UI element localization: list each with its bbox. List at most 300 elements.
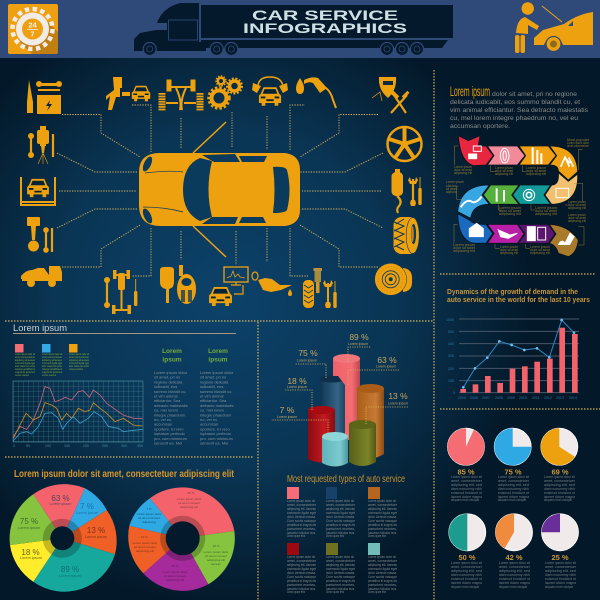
callout labels: 13 % bbox=[388, 391, 408, 401]
serpentine captions: Lorem ipsum bbox=[499, 206, 521, 210]
segment: orange curve bbox=[550, 146, 578, 180]
serpentine captions: Lorem ipsum bbox=[568, 213, 586, 217]
serpentine captions: adipiscing elit bbox=[453, 249, 475, 253]
service type legend: nascetur ridiculus mus. bbox=[326, 531, 355, 535]
legend squares: natoque penatibus et bbox=[42, 367, 62, 371]
service type legend: penatibus et magnis dis bbox=[368, 523, 397, 527]
bar and line chart bbox=[446, 318, 579, 400]
donut chart: right: aenean bbox=[211, 562, 221, 566]
serpentine captions: Lorem ipsum bbox=[526, 166, 546, 170]
segment: red bbox=[458, 136, 493, 166]
service type legend: penatibus et magnis dis bbox=[368, 579, 397, 583]
legend squares: commodo ligula eget bbox=[15, 361, 35, 365]
service type legend: commodo ligula eget bbox=[368, 511, 397, 515]
serpentine captions: adipiscing elit bbox=[495, 172, 513, 176]
service type legend: parturient montes, bbox=[368, 527, 397, 531]
donut chart: right: Lorem ipsum dolor bbox=[177, 497, 201, 501]
text columns: sit amet, pri no bbox=[154, 375, 181, 380]
serpentine captions: adipiscing elit bbox=[526, 172, 546, 176]
service type legend: nascetur ridiculus mus. bbox=[368, 531, 397, 535]
pie captions: amet, consectetuer bbox=[451, 479, 483, 483]
pie captions: aliquam erat volutpat bbox=[544, 498, 572, 502]
pie captions: adipiscing elit, sed bbox=[451, 483, 482, 487]
3D cylinder chart bbox=[271, 332, 409, 466]
icon: diagnostic monitor and car bbox=[209, 267, 248, 306]
pie captions: adipiscing elit, sed bbox=[545, 569, 576, 573]
bar and line chart: 2014 bbox=[569, 396, 577, 400]
segment: orange bbox=[519, 146, 556, 165]
donut chart: right: adipiscing bbox=[142, 520, 156, 524]
icon: chassis with tools bbox=[104, 270, 137, 314]
icon: mechanic and car bbox=[515, 2, 593, 53]
service type legend: adipiscing elit. Aenean bbox=[326, 507, 355, 511]
bar and line chart: 300 bbox=[448, 354, 454, 358]
service type legend: Lorem ipsum dolor sit bbox=[368, 499, 396, 503]
donut chart: left: 63 % bbox=[51, 494, 70, 503]
service type legend: Donec quam felis bbox=[287, 590, 305, 594]
text columns: pro, cum minimum bbox=[200, 436, 234, 441]
text: intro paragraph bbox=[450, 84, 589, 130]
text columns: ipsum bbox=[208, 356, 228, 364]
small pie: 25% bbox=[542, 514, 578, 551]
pie captions: Lorem ipsum dolor sit bbox=[451, 561, 482, 565]
donut chart: left: 89 % bbox=[61, 565, 79, 574]
icon: truck bbox=[134, 3, 453, 56]
icon: gears bbox=[208, 76, 242, 108]
heading: Lorem ipsum section: Lorem ipsum bbox=[13, 323, 67, 333]
legend squares: magnis dis parturient bbox=[15, 370, 35, 374]
line chart: 150 bbox=[64, 444, 70, 448]
pie captions: Lorem ipsum dolor sit bbox=[544, 475, 575, 479]
legend squares: amet consectetuer bbox=[15, 355, 35, 359]
serpentine captions: Lorem ipsum bbox=[446, 180, 464, 184]
donut chart: left: 18 % bbox=[21, 548, 40, 557]
icon: welding mask and hammers bbox=[372, 77, 410, 113]
segment: pink bbox=[487, 146, 525, 165]
donut chart: right: Lorem ipsum dolor bbox=[163, 570, 187, 574]
legend squares: Lorem ipsum dolor sit bbox=[15, 352, 35, 356]
icon: car with sprays bbox=[252, 77, 288, 106]
text columns: regione delicata bbox=[154, 379, 183, 384]
service type legend: nascetur ridiculus mus. bbox=[287, 531, 316, 535]
donut chart: left: 13 % bbox=[87, 526, 105, 535]
legend squares: adipiscing elit aenean bbox=[42, 358, 62, 362]
icon: spray gun and car bbox=[106, 77, 150, 110]
service type legend bbox=[287, 487, 398, 594]
donut chart: right: adipiscing elit bbox=[136, 549, 154, 553]
heading: most requested: Most requested types of auto service bbox=[287, 473, 405, 485]
segments bbox=[458, 136, 578, 257]
service type legend: parturient montes, bbox=[326, 583, 355, 587]
donut chart: left bbox=[10, 484, 117, 592]
service type legend: amet, consectetuer bbox=[326, 559, 356, 563]
serpentine captions: Lorem ipsum bbox=[500, 245, 518, 249]
text: intro paragraph: cu, mel lorem integre phaedrum no, vel eu bbox=[450, 115, 578, 122]
icon: 24/7 gear tile: 24 bbox=[28, 20, 37, 30]
pie captions: aliquam erat volutpat bbox=[499, 585, 527, 589]
donut chart: left: 75 % bbox=[20, 517, 38, 526]
legend squares: adipiscing elit aenean bbox=[69, 358, 89, 362]
text columns: efficiantur. Sea bbox=[154, 398, 181, 403]
line chart: 100 bbox=[45, 444, 51, 448]
text columns: integre phaedrum bbox=[200, 412, 232, 417]
icon: oil can bbox=[252, 272, 292, 296]
text columns: efficiantur. Sea bbox=[200, 398, 227, 403]
line chart: 350 bbox=[137, 444, 143, 448]
donut chart: right: 18 % bbox=[213, 544, 220, 548]
legend squares: natoque penatibus et bbox=[15, 367, 35, 371]
heading: dynamics chart bbox=[447, 287, 590, 304]
service type legend: dolor. Aenean massa. bbox=[368, 515, 397, 519]
icon: suspension bbox=[162, 80, 200, 111]
service type legend: Cum sociis natoque bbox=[326, 519, 355, 523]
icon: tire bbox=[394, 217, 419, 254]
service type legend: Donec quam felis bbox=[326, 534, 344, 538]
serpentine captions: Lorem ipsum bbox=[568, 200, 586, 204]
cylinder: orange bbox=[357, 384, 384, 459]
serpentine captions: dolor sit amet bbox=[495, 169, 513, 173]
legend squares: natoque penatibus bbox=[69, 367, 83, 371]
pie percentages: 42 % bbox=[505, 553, 523, 562]
service type legend: adipiscing elit. Aenean bbox=[368, 563, 397, 567]
icon: wheel rim bbox=[388, 127, 422, 161]
bar and line chart: 2012 bbox=[544, 396, 552, 400]
cylinder: navy bbox=[320, 376, 345, 450]
icon: shock absorber, tread and tools bbox=[303, 268, 337, 308]
icon: battery and tools bbox=[27, 80, 62, 114]
bar and line chart: 2007 bbox=[482, 396, 490, 400]
service type legend: commodo ligula eget bbox=[326, 567, 355, 571]
serpentine captions: dolor sit amet bbox=[568, 216, 586, 220]
pie percentages: 69 % bbox=[551, 468, 569, 476]
pie captions: laoreet dolore magna bbox=[545, 581, 576, 585]
cylinder: pink bbox=[333, 354, 360, 440]
legend squares: amet consectetuer bbox=[42, 355, 62, 359]
donut chart: left: Lorem ipsum bbox=[50, 502, 71, 506]
service type legend: penatibus et magnis dis bbox=[326, 579, 355, 583]
pie captions: diam nonummy nibh bbox=[544, 487, 575, 491]
text: intro paragraph: accumsan oportere. bbox=[450, 123, 510, 130]
text columns: integre phaedrum bbox=[154, 412, 186, 417]
text columns bbox=[154, 348, 234, 446]
service type legend: Donec quam felis bbox=[287, 534, 305, 538]
pie captions: laoreet dolore magna bbox=[451, 581, 482, 585]
service type legend: parturient montes, bbox=[287, 527, 316, 531]
callouts bbox=[271, 347, 409, 440]
pie captions: Lorem ipsum dolor sit bbox=[498, 475, 529, 479]
bar and line chart: 2005 bbox=[458, 396, 466, 400]
title: CAR SERVICE bbox=[252, 7, 398, 23]
segment: light orange bbox=[545, 173, 578, 204]
small pie: 42% bbox=[495, 514, 532, 551]
service type legend: Donec quam felis bbox=[368, 534, 386, 538]
text columns: Lorem bbox=[208, 348, 228, 355]
donut chart: right: Lorem ipsum dolor bbox=[137, 512, 161, 516]
text columns: cu, mel lorem bbox=[200, 408, 225, 413]
cylinder: light teal bbox=[322, 432, 348, 466]
legend squares: dolor massa cum sociis bbox=[69, 364, 89, 368]
pie percentages bbox=[457, 468, 569, 562]
service type legend: dolor. Aenean massa. bbox=[326, 571, 355, 575]
service type legend: parturient montes, bbox=[368, 583, 397, 587]
serpentine captions: Lorem ipsum bbox=[535, 206, 557, 210]
icon: engine injector and tools bbox=[28, 126, 53, 164]
service type legend: dolor. Aenean massa. bbox=[287, 571, 316, 575]
service type legend: Lorem ipsum dolor sit bbox=[368, 555, 396, 559]
pie percentages: 75 % bbox=[504, 468, 522, 476]
donut chart: right: Lorem ipsum dolor bbox=[204, 550, 228, 554]
service type legend: adipiscing elit. Aenean bbox=[326, 563, 355, 567]
pie captions: diam nonummy nibh bbox=[451, 487, 482, 491]
icon: car on lift bbox=[21, 177, 55, 205]
legend squares bbox=[15, 344, 89, 377]
service type legend: amet, consectetuer bbox=[326, 503, 356, 507]
text columns: sit amet, pri no bbox=[200, 375, 227, 380]
service type legend: amet, consectetuer bbox=[287, 503, 317, 507]
pie captions: adipiscing elit, sed bbox=[498, 483, 529, 487]
donut chart: right: sit amet consect bbox=[134, 545, 156, 549]
icon: fuel nozzle bbox=[296, 77, 336, 108]
service type legend: nascetur ridiculus mus. bbox=[326, 587, 355, 591]
pie captions: amet, consectetuer bbox=[499, 565, 531, 569]
pie captions: aliquam erat volutpat bbox=[451, 498, 479, 502]
pie captions: laoreet dolore magna bbox=[451, 495, 482, 499]
serpentine captions: Most popular bbox=[567, 138, 590, 142]
line chart: 200 bbox=[83, 444, 89, 448]
heading: dynamics chart: Dynamics of the growth of demand in the bbox=[447, 287, 578, 296]
legend squares: adipiscing elit aenean bbox=[15, 358, 35, 362]
serpentine captions: adipiscing elit bbox=[568, 206, 586, 210]
service type legend: adipiscing elit. Aenean bbox=[287, 507, 316, 511]
text columns: Lorem bbox=[162, 348, 182, 355]
text columns: no, vel eu bbox=[200, 417, 217, 422]
serpentine captions: sit amet bbox=[446, 187, 457, 191]
serpentine captions: adipiscing elit bbox=[500, 251, 518, 255]
service type legend: nascetur ridiculus mus. bbox=[368, 587, 397, 591]
text columns: et vim animal bbox=[154, 394, 178, 398]
text columns: luptatum perfecto bbox=[154, 431, 186, 436]
serpentine captions: Lorem ipsum bbox=[454, 165, 472, 169]
service type legend: Cum sociis natoque bbox=[287, 575, 316, 579]
legend squares: montes nascetur bbox=[42, 373, 56, 377]
donut chart: right: 13 % bbox=[141, 535, 148, 539]
service type legend: commodo ligula eget bbox=[287, 511, 316, 515]
bar and line chart: 2008 bbox=[495, 396, 503, 400]
serpentine captions: adipiscing elit bbox=[530, 251, 550, 255]
text columns: Lorem ipsum dolor bbox=[200, 370, 234, 375]
text columns: detracto maiestatis bbox=[200, 403, 234, 408]
text columns: detracto maiestatis bbox=[154, 403, 188, 408]
callout labels: 7 % bbox=[280, 405, 295, 415]
donut chart: left: Lorem ipsum bbox=[76, 511, 98, 515]
icon: car key and remote bbox=[160, 265, 196, 304]
pie captions: amet, consectetuer bbox=[545, 565, 577, 569]
line chart: 300 bbox=[121, 444, 127, 448]
serpentine captions: Lorem ipsum bbox=[495, 166, 513, 170]
callout labels: Lorem ipsum bbox=[348, 342, 368, 346]
donut chart: left: Lorem ipsum bbox=[18, 526, 40, 530]
donut chart: right: 63 % bbox=[188, 491, 195, 495]
service type legend: parturient montes, bbox=[326, 527, 355, 531]
donut chart: left: Lorem ipsum bbox=[59, 574, 81, 578]
donut chart: left: Lorem ipsum bbox=[20, 556, 42, 560]
pie captions: laoreet dolore magna bbox=[498, 495, 529, 499]
callout labels: Lorem ipsum bbox=[297, 358, 317, 362]
service type legend: adipiscing elit. Aenean bbox=[368, 507, 397, 511]
serpentine captions: adipiscing elit bbox=[535, 212, 557, 216]
bar and line chart: 2010 bbox=[519, 396, 527, 400]
text: intro paragraph: delicata iudicabit, eos summo blandit cu, et bbox=[450, 99, 580, 106]
header band bbox=[0, 0, 600, 58]
donut chart: right: 45 % bbox=[172, 564, 179, 568]
bar and line chart: 0 bbox=[453, 391, 455, 395]
service type legend: dolor. Aenean massa. bbox=[287, 515, 316, 519]
icon: brake disc bbox=[375, 263, 412, 295]
pie captions: laoreet dolore magna bbox=[499, 581, 530, 585]
serpentine captions: Lorem ipsum dolor bbox=[567, 141, 590, 145]
legend squares: dolor massa cum sociis bbox=[15, 364, 35, 368]
heading: donut charts: Lorem ipsum dolor sit amet, consectetuer adipiscing elit bbox=[14, 468, 234, 480]
service type legend: nascetur ridiculus mus. bbox=[287, 587, 316, 591]
serpentine captions bbox=[446, 138, 590, 255]
bar and line chart: 2013 bbox=[556, 396, 564, 400]
service type legend: commodo ligula eget bbox=[287, 567, 316, 571]
text columns: Lorem ipsum dolor bbox=[154, 370, 188, 375]
segment: magenta bbox=[487, 224, 524, 243]
service type legend: amet, consectetuer bbox=[368, 559, 398, 563]
text columns: accumsan bbox=[154, 422, 172, 427]
icon: 24/7 gear tile bbox=[8, 4, 58, 54]
donut chart: right: sit amet consect bbox=[164, 574, 186, 578]
text: intro paragraph: vim animal efficiantur. Sea detracto maiestatis bbox=[450, 107, 589, 114]
service type legend: amet, consectetuer bbox=[287, 559, 317, 563]
line chart: 0 bbox=[13, 444, 15, 448]
service type legend: Lorem ipsum dolor sit bbox=[287, 499, 315, 503]
segment: teal bbox=[513, 185, 551, 204]
pie captions: euismod tincidunt ut bbox=[451, 577, 482, 581]
bar and line chart: 100 bbox=[448, 379, 454, 383]
serpentine captions: adipiscing elit bbox=[454, 171, 472, 175]
bar and line chart: 500 bbox=[448, 330, 454, 334]
legend squares: commodo ligula eget bbox=[42, 361, 62, 365]
text columns: senserit ea. Mei bbox=[200, 440, 228, 446]
pie captions: diam nonummy nibh bbox=[545, 573, 576, 577]
donut chart: left: Lorem ipsum bbox=[85, 535, 107, 539]
pie captions: diam nonummy nibh bbox=[499, 573, 530, 577]
bar and line chart: 1000 bbox=[446, 318, 454, 322]
donut chart: right: sit amet consect bbox=[138, 516, 160, 520]
text columns: regione delicata bbox=[200, 379, 229, 384]
white icons bbox=[461, 146, 574, 245]
service type legend: Lorem ipsum dolor sit bbox=[287, 555, 315, 559]
pie percentages: 85 % bbox=[457, 468, 475, 476]
segment: blue bbox=[458, 214, 493, 243]
serpentine captions: adipiscing elit bbox=[499, 212, 521, 216]
text columns: oportere. Ei vero bbox=[200, 426, 230, 431]
text columns: summo blandit cu, bbox=[154, 389, 186, 394]
donut chart: right: Lorem ipsum dolor bbox=[133, 541, 157, 545]
title bbox=[243, 7, 407, 36]
text columns: iudicabit, eos bbox=[200, 384, 223, 389]
segment: green bbox=[483, 185, 519, 204]
bar and line chart: 2009 bbox=[507, 396, 515, 400]
cylinder: olive bbox=[349, 420, 376, 466]
small pie: 50% bbox=[449, 514, 486, 551]
serpentine captions: dolor bbox=[446, 184, 458, 188]
bar and line chart: 2011 bbox=[532, 396, 540, 400]
donut chart: right: sit amet consect bbox=[205, 554, 227, 558]
text columns: no, vel eu bbox=[154, 417, 171, 422]
line chart: 250 bbox=[102, 444, 108, 448]
pie captions: diam nonummy nibh bbox=[498, 487, 529, 491]
text columns: cu, mel lorem bbox=[154, 408, 179, 413]
text columns: senserit ea. Mei bbox=[154, 440, 182, 446]
serpentine captions: dolor sit amet bbox=[500, 248, 518, 252]
serpentine captions: dolor sit amet bbox=[535, 209, 557, 213]
pie captions: aliquam erat volutpat bbox=[545, 585, 573, 589]
service type legend: penatibus et magnis dis bbox=[326, 523, 355, 527]
callout labels: Lorem ipsum bbox=[388, 402, 408, 406]
service type legend: Cum sociis natoque bbox=[368, 519, 397, 523]
line chart bbox=[13, 381, 143, 448]
pie captions: diam nonummy nibh bbox=[451, 573, 482, 577]
text columns: ipsum bbox=[162, 356, 182, 364]
donut chart: right: 7 % bbox=[146, 507, 152, 511]
pie percentages: 50 % bbox=[458, 553, 476, 562]
text columns: luptatum perfecto bbox=[200, 431, 232, 436]
callout labels: 75 % bbox=[298, 348, 318, 358]
pie captions: euismod tincidunt ut bbox=[545, 577, 576, 581]
pie captions: amet, consectetuer bbox=[451, 565, 483, 569]
callout labels: Lorem ipsum bbox=[376, 364, 396, 368]
service type legend: penatibus et magnis dis bbox=[287, 579, 316, 583]
service type legend: Cum sociis natoque bbox=[368, 575, 397, 579]
donut chart: left: 7 % bbox=[80, 502, 94, 511]
text: intro paragraph: dolor sit amet, pri no regione bbox=[492, 91, 577, 98]
legend squares: montes nascetur bbox=[15, 373, 29, 377]
legend squares: Lorem ipsum dolor sit bbox=[42, 352, 62, 356]
callout labels: 89 % bbox=[349, 332, 369, 342]
line chart: 50 bbox=[26, 444, 30, 448]
service type legend: penatibus et magnis dis bbox=[287, 523, 316, 527]
text columns: iudicabit, eos bbox=[154, 384, 177, 389]
pie captions: aliquam erat volutpat bbox=[498, 498, 526, 502]
serpentine captions: Lorem ipsum bbox=[453, 243, 475, 247]
service type legend: Cum sociis natoque bbox=[326, 575, 355, 579]
icon: piston and tools bbox=[27, 217, 52, 253]
cylinder: red bbox=[308, 406, 335, 462]
legend squares: magnis dis parturient bbox=[42, 370, 62, 374]
serpentine captions: adipiscing elit bbox=[568, 219, 586, 223]
serpentine captions: Lorem ipsum bbox=[530, 245, 550, 249]
pie captions: laoreet dolore magna bbox=[544, 495, 575, 499]
service type legend: Lorem ipsum dolor sit bbox=[326, 555, 354, 559]
serpentine captions: dolor sit amet bbox=[526, 169, 546, 173]
callout lines bbox=[454, 146, 584, 248]
text: intro paragraph: Lorem ipsum bbox=[450, 84, 490, 99]
service type legend: amet, consectetuer bbox=[368, 503, 398, 507]
serpentine captions: dolor sit amet bbox=[453, 246, 475, 250]
pie captions: Lorem ipsum dolor sit bbox=[545, 561, 576, 565]
icon: exhaust and tools bbox=[392, 169, 422, 213]
title: INFOGRAPHICS bbox=[243, 20, 407, 36]
text columns: oportere. Ei vero bbox=[154, 426, 184, 431]
text columns: pro, cum minimum bbox=[154, 436, 188, 441]
donut chart: right bbox=[128, 487, 235, 591]
text columns: et vim animal bbox=[200, 394, 224, 398]
pie percentages: 25 % bbox=[551, 553, 569, 562]
service type legend: Donec quam felis bbox=[368, 590, 386, 594]
